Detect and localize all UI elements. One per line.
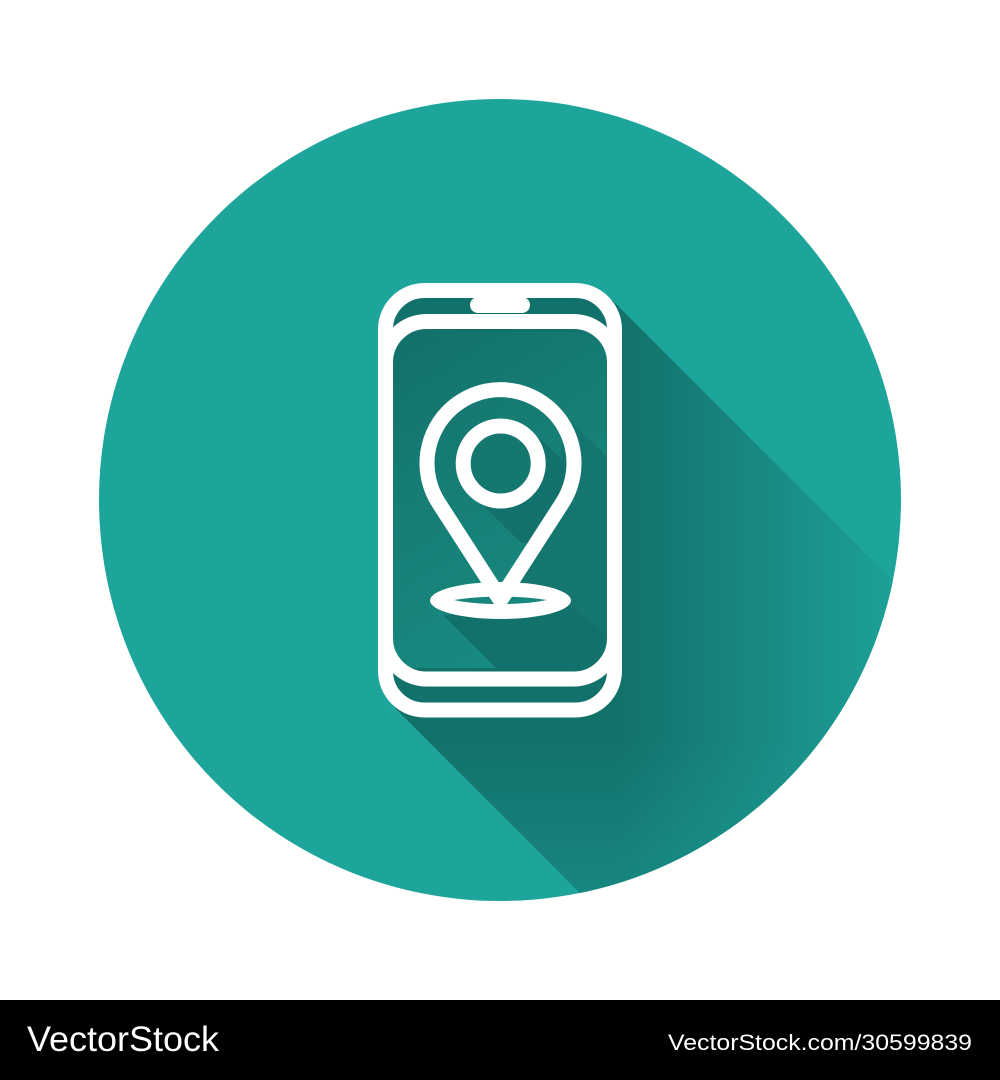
phone notch xyxy=(470,297,530,313)
icon: smartphone with location pin xyxy=(386,290,614,710)
phone outer body xyxy=(386,290,614,710)
pin inner circle xyxy=(463,426,538,501)
phone screen with pin shadows xyxy=(393,329,610,672)
pin base ellipse xyxy=(430,582,571,619)
long shadow of phone xyxy=(395,300,905,905)
green circle badge xyxy=(99,99,901,901)
footer bar xyxy=(0,1000,1000,1080)
footer image id text: VectorStock.com/30599839 xyxy=(668,1030,972,1055)
phone inner screen frame xyxy=(386,322,614,679)
location pin outline xyxy=(427,390,574,599)
phone top and bottom gaps xyxy=(393,298,607,702)
footer logo text: VectorStock xyxy=(27,1020,220,1059)
